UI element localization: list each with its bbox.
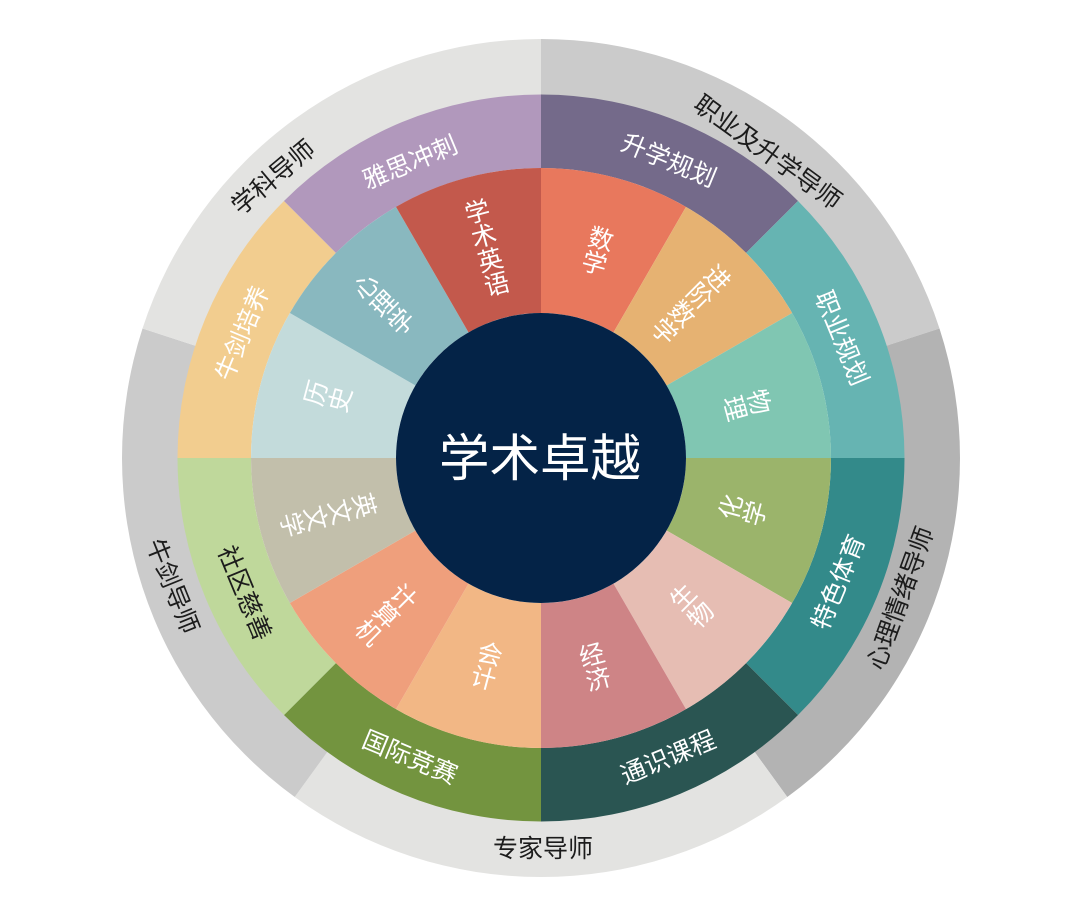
- sector: community charity: [178, 458, 336, 715]
- label: accounting: 会计: [465, 637, 505, 693]
- label: computing: 计算机: [349, 577, 422, 650]
- label: maths: 数学: [576, 222, 616, 278]
- centre title: 学术卓越: [439, 430, 641, 487]
- sector: career and admissions mentors: [541, 39, 939, 346]
- label: English literature: 英文文学: [276, 487, 380, 540]
- sector: computing: [290, 530, 468, 709]
- label: biology: 生物: [662, 579, 718, 635]
- sector: accounting: [396, 584, 541, 748]
- sector: English literature: [251, 458, 415, 603]
- sector: subject mentors: [143, 39, 541, 346]
- label: history: 历史: [299, 378, 355, 418]
- label: subject mentors: 学科导师: [226, 135, 321, 221]
- label: competitions: 国际竞赛: [358, 726, 461, 790]
- sector: psychology: [290, 207, 468, 386]
- inner ring: subjects: [251, 168, 831, 748]
- sector: further maths: [614, 207, 792, 386]
- label: Oxbridge mentors: 牛剑导师: [140, 535, 204, 638]
- label: career mentors: 职业及升学导师: [688, 90, 846, 216]
- middle ring labels: [211, 129, 873, 790]
- label: Oxbridge training: 牛剑培养: [211, 282, 275, 385]
- label: economics: 经济: [573, 639, 613, 695]
- sector: career planning: [746, 201, 904, 458]
- inner ring labels: [276, 196, 775, 695]
- label: expert mentors: 专家导师: [493, 835, 593, 863]
- label: sports: 特色体育: [807, 531, 871, 634]
- sector: history: [251, 313, 415, 458]
- sector: competitions: [284, 663, 541, 822]
- label: community charity: 社区慈善: [212, 542, 276, 645]
- sector: physics: [667, 313, 831, 458]
- label: further maths: 进阶数学: [645, 258, 736, 349]
- label: IELTS: 雅思冲刺: [359, 131, 462, 195]
- sector: IELTS: [284, 94, 541, 253]
- sector: admissions planning: [541, 94, 798, 253]
- sector: economics: [541, 584, 686, 748]
- sector: wellbeing mentors: [754, 329, 960, 797]
- sector: sports: [746, 458, 904, 715]
- label: general courses: 通识课程: [617, 726, 720, 790]
- label: admissions planning: 升学规划: [617, 129, 720, 193]
- label: academic English: 学术英语: [459, 196, 512, 300]
- outer ring labels: [140, 90, 940, 863]
- label: wellbeing mentors: 心理情绪导师: [862, 523, 940, 674]
- sector: academic English: [396, 168, 541, 332]
- label: physics: 物理: [719, 383, 775, 423]
- sector: maths: [541, 168, 686, 332]
- sector: biology: [614, 530, 792, 709]
- sector: Oxbridge mentors: [122, 329, 328, 797]
- sector: Oxbridge training: [178, 201, 336, 458]
- label: career planning: 职业规划: [809, 287, 873, 390]
- sector: general courses: [541, 663, 798, 822]
- label: chemistry: 化学: [714, 492, 770, 532]
- sector: expert mentors: [295, 752, 787, 877]
- label: psychology: 心理学: [346, 268, 419, 341]
- centre circle: [396, 313, 686, 603]
- middle ring: programmes: [178, 94, 904, 822]
- sector: chemistry: [667, 458, 831, 603]
- outer ring: mentor types: [122, 39, 960, 877]
